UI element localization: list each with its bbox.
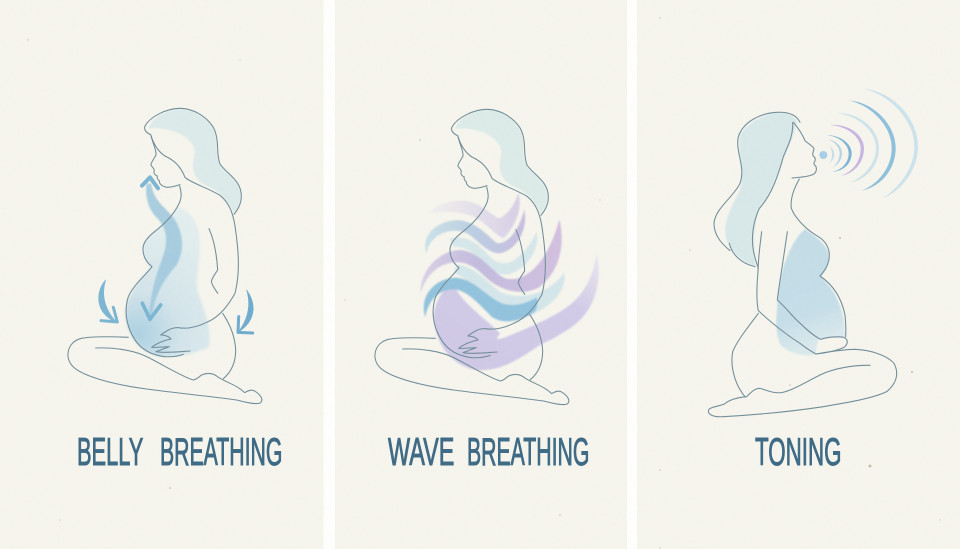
hair wash [455,109,547,214]
hair wash [725,113,797,266]
belly wash [776,229,845,355]
arc 4 [830,125,864,176]
wave: purple [421,219,562,293]
wave: blue [424,278,537,321]
illustration: belly breathing figure [68,108,262,404]
sound source dot [819,151,827,159]
heading: belly breathing: BREATHING [160,430,282,474]
wave: light teal centre [450,232,537,274]
panel: wave breathing [335,0,627,549]
line drawing [708,112,897,417]
arrow: breath in and down the body [146,183,182,317]
arc 2 [828,139,842,167]
heading: belly breathing [77,429,282,474]
illustration: toning figure [708,88,918,417]
line drawing [375,109,569,405]
heading: belly breathing: BELLY [77,429,143,474]
wave: faint top [428,193,520,238]
line drawing [68,108,262,404]
heading: toning: TONING [755,429,841,474]
heading: wave breathing [388,430,589,474]
illustration: wave breathing figure [375,109,599,405]
heading: wave breathing: WAVE [388,430,454,473]
arrow: left side [99,280,117,322]
body wash [126,207,210,357]
arrow: right side [238,290,253,333]
arc 6 [849,101,896,191]
wave: blue to lilac [425,209,525,254]
arrow head: top [142,177,158,188]
sound arcs [819,88,918,198]
arc 7 [863,88,918,198]
waves [421,193,599,370]
arc 1 [829,146,834,164]
heading: wave breathing: BREATHING [467,430,589,474]
panel: belly breathing [0,0,324,549]
wave: light teal lower [453,265,565,318]
wave: large lilac with belly [434,253,599,370]
hair wash [148,109,241,213]
arc 3 [826,135,852,172]
arrow head: bottom [142,303,161,319]
arc 5 [837,113,879,183]
panel: toning [637,0,960,549]
